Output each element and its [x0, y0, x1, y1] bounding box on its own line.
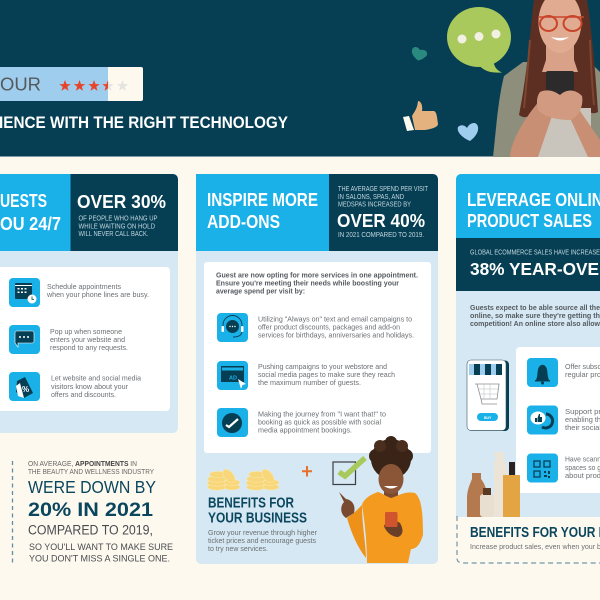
panel header: OVER 30%	[77, 192, 166, 212]
panel: leverage online product sales	[456, 174, 600, 564]
icon: chat	[9, 325, 40, 354]
panel header: WILL NEVER CALL BACK.	[78, 231, 149, 238]
text: pop up: Pop up when someone	[50, 327, 122, 336]
white feature card	[516, 347, 600, 493]
text: pop up: respond to any requests.	[50, 343, 128, 352]
stat callout: appointments down: SO YOU'LL WANT TO MAKE SURE	[29, 542, 173, 553]
text: pop up	[50, 327, 128, 352]
text: pushing campaigns: the maximum number of guests.	[258, 378, 361, 387]
stat callout: appointments down	[12, 461, 173, 565]
panel: inspire more add-ons	[196, 174, 438, 564]
intro text: Guest are now opting for more services in one appointment.	[216, 271, 418, 280]
text: schedule: Schedule appointments	[47, 282, 121, 291]
icon: discount tag	[9, 372, 40, 401]
header subtitle: IENCE WITH THE RIGHT TECHNOLOGY	[0, 114, 288, 132]
stat callout: appointments down: THE BEAUTY AND WELLNESS INDUSTRY	[28, 469, 154, 476]
panel header: INSPIRE MORE	[207, 190, 318, 210]
panel: answer guests 24/7	[0, 174, 178, 433]
stat callout: appointments down: 20% IN 2021	[28, 500, 153, 521]
intro text	[216, 271, 418, 296]
panel header	[0, 174, 178, 251]
panel header: OF PEOPLE WHO HANG UP	[78, 216, 158, 222]
heading: benefits: YOUR BUSINESS	[208, 511, 307, 527]
text: pushing campaigns: Pushing campaigns to your webstore and	[258, 362, 387, 371]
header banner	[0, 0, 600, 157]
text: let website: offers and discounts.	[51, 390, 116, 399]
icon: teal heart	[412, 47, 427, 60]
text: schedule	[46, 282, 149, 299]
text: support products	[565, 407, 600, 432]
text: benefits detail: to try new services.	[208, 544, 268, 553]
icon: blue heart	[458, 123, 478, 141]
text: always on	[258, 315, 414, 340]
text: pushing campaigns	[258, 362, 395, 387]
rating bar	[0, 67, 143, 101]
rating bar: OUR	[0, 74, 41, 94]
text: offer subscriptions	[565, 362, 600, 379]
panel header: THE AVERAGE SPEND PER VISIT	[338, 186, 429, 193]
icon: calendar	[9, 278, 40, 307]
illustration: shop phone: BUY	[484, 416, 492, 420]
text: have scannable	[565, 455, 600, 480]
icon: discount tag: %	[22, 385, 29, 394]
text: let website: visitors know about your	[51, 382, 129, 391]
text: benefits detail	[208, 528, 318, 553]
icon: checkbox	[333, 458, 365, 484]
panel header	[196, 174, 438, 251]
icon: coins	[207, 467, 279, 490]
text: making the journey: media appointment bookings.	[258, 426, 352, 434]
text: offer subscriptions: regular pro	[565, 370, 600, 379]
panel header	[456, 174, 600, 291]
photo: woman with phone	[493, 0, 600, 157]
icon: ad window: AD	[229, 376, 237, 382]
heading: benefits: BENEFITS FOR	[208, 496, 294, 512]
text: benefits detail: ticket prices and encourage guests	[208, 536, 316, 545]
intro text	[470, 303, 600, 328]
icon: headset	[217, 313, 248, 342]
text: making the journey	[258, 409, 386, 434]
text: support products: their social	[565, 423, 600, 432]
text: making the journey: booking as quick as possible with social	[258, 417, 381, 426]
text: always on: services for birthdays, anniversaries and holidays.	[258, 331, 414, 340]
photo: woman in orange sweater	[339, 436, 423, 563]
stat callout: appointments down: COMPARED TO 2019,	[28, 523, 153, 538]
icon: thumbs up	[403, 101, 438, 131]
panel header: IN 2021 COMPARED TO 2019.	[338, 232, 424, 239]
icon: ad window	[217, 361, 248, 390]
panel header: OVER 40%	[337, 211, 425, 231]
text: schedule: when your phone lines are busy.	[46, 290, 149, 299]
stat callout: appointments down: YOU DON'T MISS A SINGLE ONE.	[29, 554, 170, 565]
icon: thumbs social	[527, 406, 558, 434]
heading: benefits	[208, 496, 307, 527]
white feature card	[0, 267, 170, 411]
text: always on: Utilizing "Always on" text and email campaigns to	[258, 315, 412, 324]
text: let website: Let website and social media	[51, 374, 142, 382]
icon: bell	[527, 358, 558, 387]
icon: chat bubble	[447, 7, 511, 73]
intro text: Ensure you're meeting their needs while boosting your	[216, 279, 399, 288]
text: have scannable: about prod	[565, 471, 600, 480]
text: support products: Support pr	[565, 407, 600, 416]
text: let website	[51, 374, 142, 399]
icon: check circle	[217, 408, 248, 437]
dashed benefits box	[456, 516, 600, 564]
text: always on: offer product discounts, packages and add-on	[258, 323, 400, 332]
icon: qr code	[527, 454, 558, 482]
panel header: 38% YEAR-OVE	[470, 259, 599, 279]
panel header: WHILE WAITING ON HOLD	[78, 224, 155, 230]
text: benefits detail: Grow your revenue through higher	[208, 528, 318, 537]
text: making the journey: Making the journey from "I want that!" to	[258, 409, 386, 418]
panel header: MEDSPAS INCREASED BY	[338, 202, 411, 208]
photo: product bottles	[467, 452, 520, 517]
white content card	[204, 262, 431, 453]
illustration: shop phone	[467, 360, 509, 431]
text: pushing campaigns: social media pages to make sure they reach	[258, 370, 395, 379]
panel header: ADD-ONS	[207, 212, 280, 232]
icon: plus	[302, 466, 312, 476]
panel header: IN SALONS, SPAS, AND	[338, 194, 404, 201]
intro text: average spend per visit by:	[216, 287, 305, 296]
stat callout: appointments down: WERE DOWN BY	[28, 477, 156, 497]
panel header: OU 24/7	[0, 214, 61, 234]
panel header: UESTS	[0, 191, 47, 211]
text: pop up: enters your website and	[50, 335, 125, 344]
stat callout: appointments down: ON AVERAGE, APPOINTMENTS IN	[28, 461, 137, 468]
